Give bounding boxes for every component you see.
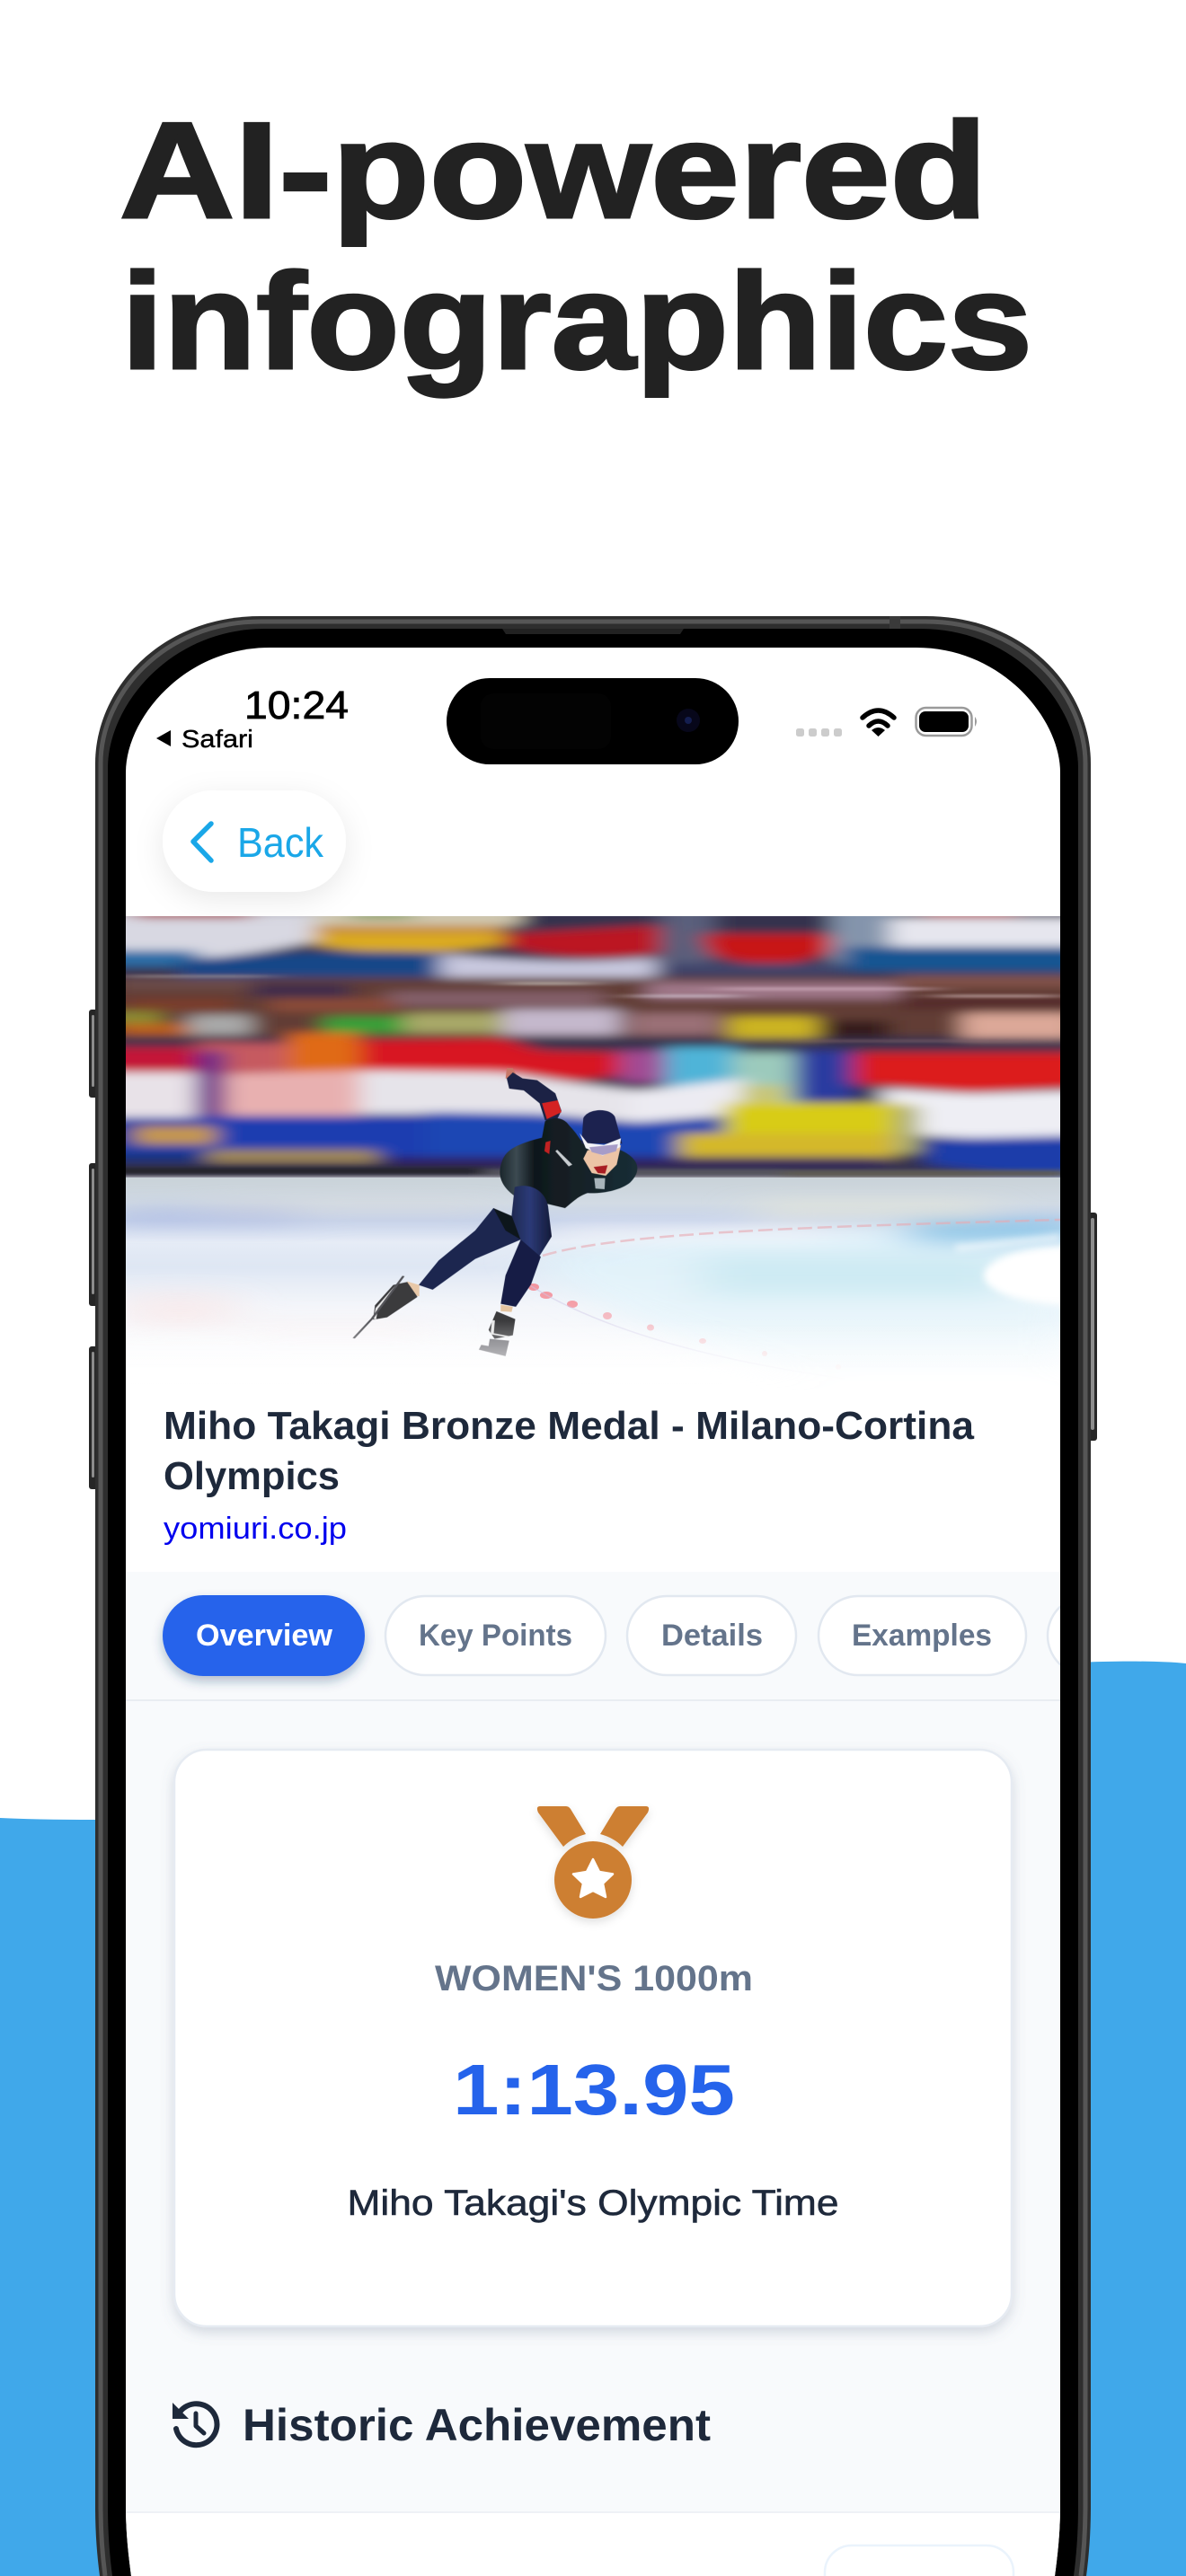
- dark rink barrier: [90, 1168, 1069, 1177]
- article heading: [164, 1404, 975, 1498]
- ice surface: [126, 1178, 1060, 1360]
- tab: key points: [385, 1596, 606, 1675]
- blue wave background: [0, 1662, 1186, 2576]
- wifi icon: [863, 710, 894, 737]
- tab: clipped next: [1046, 1606, 1060, 1665]
- skater figure: [354, 1068, 637, 1356]
- hero photo: speed skater: [90, 907, 1164, 1401]
- title: infographics: [121, 245, 1032, 398]
- caption: Miho Takagi's Olympic Time: [347, 2183, 839, 2223]
- clock: 10:24: [244, 684, 349, 728]
- battery icon: [916, 708, 977, 736]
- back button: Back: [237, 819, 324, 866]
- yellow flag: [724, 1103, 908, 1135]
- lower flag: red band: [90, 1047, 198, 1074]
- blurred stadium background: [90, 907, 1087, 1177]
- safari back indicator: Safari: [181, 725, 253, 753]
- crowd: [90, 977, 1087, 1037]
- back button: [163, 790, 346, 892]
- partial card: [825, 2545, 1013, 2576]
- tab: details: Details: [661, 1619, 763, 1653]
- stat card: [174, 1750, 1012, 2326]
- content background: [126, 2510, 1060, 2511]
- tab: examples: [819, 1596, 1026, 1675]
- phone frame: [95, 616, 1091, 2576]
- safari back indicator: [156, 729, 252, 747]
- lower white section: [126, 2511, 1060, 2576]
- tab: details: [627, 1596, 796, 1675]
- article heading: Olympics: [164, 1454, 340, 1498]
- icon: history clock: [173, 2403, 217, 2445]
- time value: 1:13.95: [453, 2050, 735, 2130]
- lower flag: blue band: [126, 1114, 214, 1159]
- lower flag: white band: [90, 1072, 199, 1117]
- section heading: historic achievement: Historic Achievement: [243, 2400, 711, 2450]
- tab: key points: Key Points: [419, 1619, 572, 1653]
- upper flags: [90, 912, 323, 959]
- article heading: Miho Takagi Bronze Medal - Milano-Cortina: [164, 1404, 975, 1448]
- track marker dots: [528, 1284, 767, 1356]
- phone screen: [126, 648, 1060, 2576]
- status bar: [156, 678, 977, 764]
- tab bar: [126, 1593, 1060, 1701]
- icon: bronze medal: [537, 1806, 649, 1919]
- tab: overview: [163, 1595, 365, 1676]
- source link: yomiuri.co.jp: [164, 1512, 347, 1546]
- event label: WOMEN'S 1000m: [435, 1959, 753, 1998]
- phone side buttons: [89, 1010, 1097, 1489]
- title: AI-powered: [119, 94, 987, 247]
- title: [119, 94, 1032, 398]
- tab: overview: Overview: [196, 1619, 333, 1653]
- signal dots: [796, 728, 842, 737]
- dynamic island: [447, 678, 739, 764]
- tab: examples: Examples: [852, 1619, 992, 1653]
